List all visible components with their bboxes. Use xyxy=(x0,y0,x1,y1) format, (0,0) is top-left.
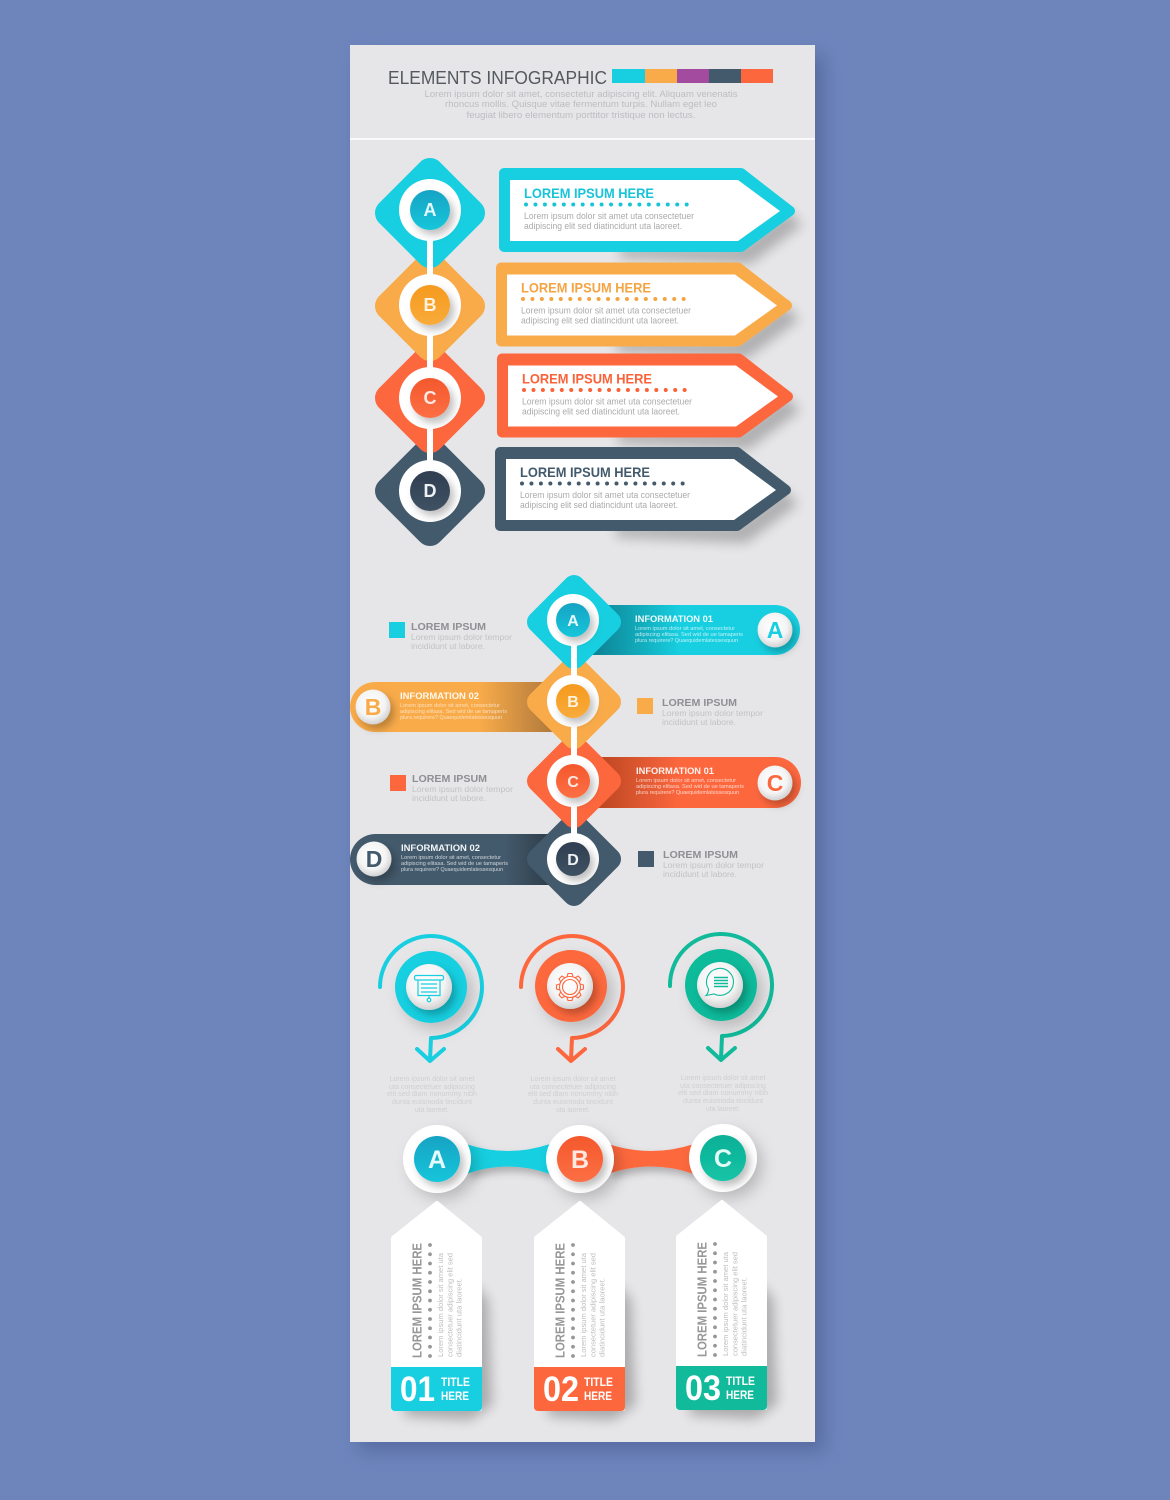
node D xyxy=(547,833,599,885)
section 1: arrow banners xyxy=(500,173,802,543)
node D xyxy=(399,460,461,522)
banner C xyxy=(502,358,800,450)
icon: presentation board xyxy=(414,976,444,1002)
intro text xyxy=(424,89,738,121)
card 03: Lorem ipsum dolor sit amet uta xyxy=(721,1251,730,1356)
legend B: incididunt ut labore. xyxy=(662,717,736,727)
card 01 xyxy=(391,1203,492,1420)
legend D: Lorem ipsum dolor tempor xyxy=(663,860,764,870)
pill B: INFORMATION 02 xyxy=(400,691,479,701)
banner A: Lorem ipsum dolor sit amet uta consectetuer xyxy=(524,211,694,222)
legend B xyxy=(637,697,763,727)
pill D: Lorem ipsum dolor sit amet, consectetur xyxy=(401,855,501,861)
circular arrow 3: elit sed diam nonummy nibh xyxy=(678,1088,768,1097)
panel: poster sheet xyxy=(350,45,815,1442)
pill B: adipiscing elitasa. Sed wid de ue tamaperis xyxy=(400,709,507,715)
icon: gear xyxy=(556,974,584,1000)
legend C: Lorem ipsum dolor tempor xyxy=(412,784,513,794)
title: ELEMENTS INFOGRAPHIC xyxy=(388,68,607,88)
legend A: LOREM IPSUM xyxy=(411,621,486,633)
circular arrow 1: uta laoreet. xyxy=(415,1105,449,1114)
intro text: rhoncus mollis. Quisque vitae fermentum turpis. Nullam eget leo xyxy=(445,99,717,110)
card 02: diatincidunt uta laoreet. xyxy=(598,1278,606,1357)
card 03: 03 xyxy=(685,1369,721,1408)
node B: B xyxy=(424,295,436,315)
card 02: TITLE xyxy=(584,1377,613,1389)
section 3: circular arrows xyxy=(380,934,772,1114)
section 1: diamond timeline xyxy=(369,152,491,552)
node C xyxy=(547,755,599,807)
card 03: LOREM IPSUM HERE xyxy=(694,1242,710,1357)
pill C: plura requirere? Quaequidemlatessesquun xyxy=(636,790,739,796)
pill D: plura requirere? Quaequidemlatessesquun xyxy=(401,867,503,873)
circular arrow 3: uta consectetuer adipiscing xyxy=(680,1081,766,1090)
banner A: LOREM IPSUM HERE xyxy=(524,185,654,201)
node A xyxy=(403,1125,471,1193)
section 2: information pills xyxy=(350,605,801,885)
circular arrow 2: uta laoreet. xyxy=(556,1105,590,1114)
node C xyxy=(399,367,461,429)
card 02 xyxy=(534,1203,635,1420)
pill D: D xyxy=(366,846,382,872)
pill A: A xyxy=(767,617,783,643)
pill D xyxy=(350,834,590,885)
pill B: Lorem ipsum dolor sit amet, consectetur xyxy=(400,703,500,709)
legend C: LOREM IPSUM xyxy=(412,773,487,785)
circular arrow 1 xyxy=(380,936,482,1114)
pill C: adipiscing elitasa. Sed wid de ue tamaperis xyxy=(636,784,744,790)
legend A xyxy=(389,621,512,651)
banner D xyxy=(500,452,798,543)
legend A: incididunt ut labore. xyxy=(411,641,485,651)
pill D: INFORMATION 02 xyxy=(401,843,480,853)
legend D xyxy=(638,849,764,879)
banner D: adipiscing elit sed diatincidunt uta laoreet. xyxy=(520,500,678,511)
banner D: Lorem ipsum dolor sit amet uta consectetuer xyxy=(520,490,690,501)
node A xyxy=(399,179,461,241)
intro text: Lorem ipsum dolor sit amet, consectetur adipiscing elit. Aliquam venenatis xyxy=(424,89,738,100)
circular arrow 3: dunta euismoda tincidunt xyxy=(683,1096,764,1105)
circular arrow 1: dunta euismoda tincidunt xyxy=(392,1097,473,1106)
node A: A xyxy=(428,1146,446,1174)
card 02: HERE xyxy=(584,1391,612,1403)
card 01: TITLE xyxy=(441,1377,470,1389)
legend B: LOREM IPSUM xyxy=(662,697,737,709)
circular arrow 1: elit sed diam nonummy nibh xyxy=(387,1089,477,1098)
pill C xyxy=(561,757,801,808)
circular arrow 1: Lorem ipsum dolor sit amet xyxy=(390,1074,475,1083)
section 4: title cards xyxy=(391,1202,777,1420)
section 2: diamond timeline xyxy=(522,570,626,911)
circular arrow 2: elit sed diam nonummy nibh xyxy=(528,1089,618,1098)
node D: D xyxy=(424,481,436,501)
connector A to B xyxy=(466,1144,550,1174)
pill C: C xyxy=(767,770,783,796)
pill A: adipiscing elitasa. Sed wid de ue tamaperis xyxy=(635,632,743,638)
legend D: incididunt ut labore. xyxy=(663,869,737,879)
card 02: Lorem ipsum dolor sit amet uta xyxy=(579,1252,588,1357)
circular arrow 2: Lorem ipsum dolor sit amet xyxy=(530,1074,616,1083)
connector B to C xyxy=(608,1144,694,1174)
pill A: INFORMATION 01 xyxy=(635,614,713,624)
banner B: Lorem ipsum dolor sit amet uta consectetuer xyxy=(521,306,691,316)
pill A xyxy=(560,605,800,655)
node C: C xyxy=(424,388,436,408)
node D: D xyxy=(567,852,579,869)
node B xyxy=(399,274,461,336)
node A xyxy=(547,594,599,646)
card 01: Lorem ipsum dolor sit amet uta xyxy=(436,1252,445,1357)
pill B: plura requirere? Quaequidemlatessesquun xyxy=(400,715,502,721)
pill D: adipiscing elitasa. Sed wid de ue tamaperis xyxy=(401,861,508,867)
banner B xyxy=(501,268,799,358)
banner B: adipiscing elit sed diatincidunt uta laoreet. xyxy=(521,316,679,326)
banner C: LOREM IPSUM HERE xyxy=(522,370,652,386)
circular arrow 3: Lorem ipsum dolor sit amet xyxy=(680,1073,766,1082)
card 03 xyxy=(676,1202,777,1419)
legend A: Lorem ipsum dolor tempor xyxy=(411,632,512,642)
circular arrow 2 xyxy=(521,936,623,1114)
legend C xyxy=(390,773,513,803)
banner B: LOREM IPSUM HERE xyxy=(521,280,651,296)
node B: B xyxy=(567,694,579,711)
header xyxy=(388,68,773,121)
pill C: INFORMATION 01 xyxy=(636,766,714,776)
section 2: legends xyxy=(389,621,764,879)
circular arrow 2: dunta euismoda tincidunt xyxy=(533,1097,614,1106)
node B xyxy=(547,675,599,727)
legend B: Lorem ipsum dolor tempor xyxy=(662,708,763,718)
card 03: consectetuer adipiscing elit sed xyxy=(730,1252,740,1356)
node C: C xyxy=(567,774,579,791)
card 03: TITLE xyxy=(726,1376,755,1388)
legend C: incididunt ut labore. xyxy=(412,793,486,803)
icon: chat bubble xyxy=(706,968,733,996)
card 03: HERE xyxy=(726,1390,754,1402)
banner C: adipiscing elit sed diatincidunt uta laoreet. xyxy=(522,406,680,418)
card 02: LOREM IPSUM HERE xyxy=(552,1243,568,1358)
circular arrow 3 xyxy=(670,934,772,1113)
intro text: feugiat libero elementum porttitor tristique non lectus. xyxy=(466,110,696,121)
banner C: Lorem ipsum dolor sit amet uta consectetuer xyxy=(522,396,692,408)
pill B: B xyxy=(365,694,381,720)
circular arrow 1: uta consectetuer adipiscing xyxy=(389,1082,475,1091)
pill A: Lorem ipsum dolor sit amet, consectetur xyxy=(635,626,735,632)
banner D: LOREM IPSUM HERE xyxy=(520,464,650,480)
banner A: adipiscing elit sed diatincidunt uta laoreet. xyxy=(524,221,682,232)
node B xyxy=(546,1125,614,1193)
circular arrow 3: uta laoreet. xyxy=(706,1104,740,1113)
card 01: HERE xyxy=(441,1391,469,1403)
legend D: LOREM IPSUM xyxy=(663,849,738,861)
section 4: connected nodes xyxy=(403,1124,757,1193)
pill A: plura requirere? Quaequidemlatessesquun xyxy=(635,638,738,644)
colour bar xyxy=(612,69,773,83)
node C xyxy=(689,1124,757,1192)
card 01: LOREM IPSUM HERE xyxy=(410,1243,424,1358)
node A: A xyxy=(424,200,436,220)
pill B xyxy=(350,682,590,732)
node A: A xyxy=(567,613,579,630)
pill C: Lorem ipsum dolor sit amet, consectetur xyxy=(636,778,736,784)
card 02: consectetuer adipiscing elit sed xyxy=(588,1253,598,1357)
card 03: diatincidunt uta laoreet. xyxy=(740,1277,748,1356)
card 02: 02 xyxy=(543,1370,579,1409)
node B: B xyxy=(571,1146,589,1174)
node C: C xyxy=(714,1145,732,1173)
circular arrow 2: uta consectetuer adipiscing xyxy=(530,1082,616,1091)
banner A xyxy=(504,173,802,264)
card 01: diatincidunt uta laoreet. xyxy=(454,1278,464,1357)
card 01: 01 xyxy=(400,1370,435,1409)
card 01: consectetuer adipiscing elit sed xyxy=(446,1253,454,1357)
